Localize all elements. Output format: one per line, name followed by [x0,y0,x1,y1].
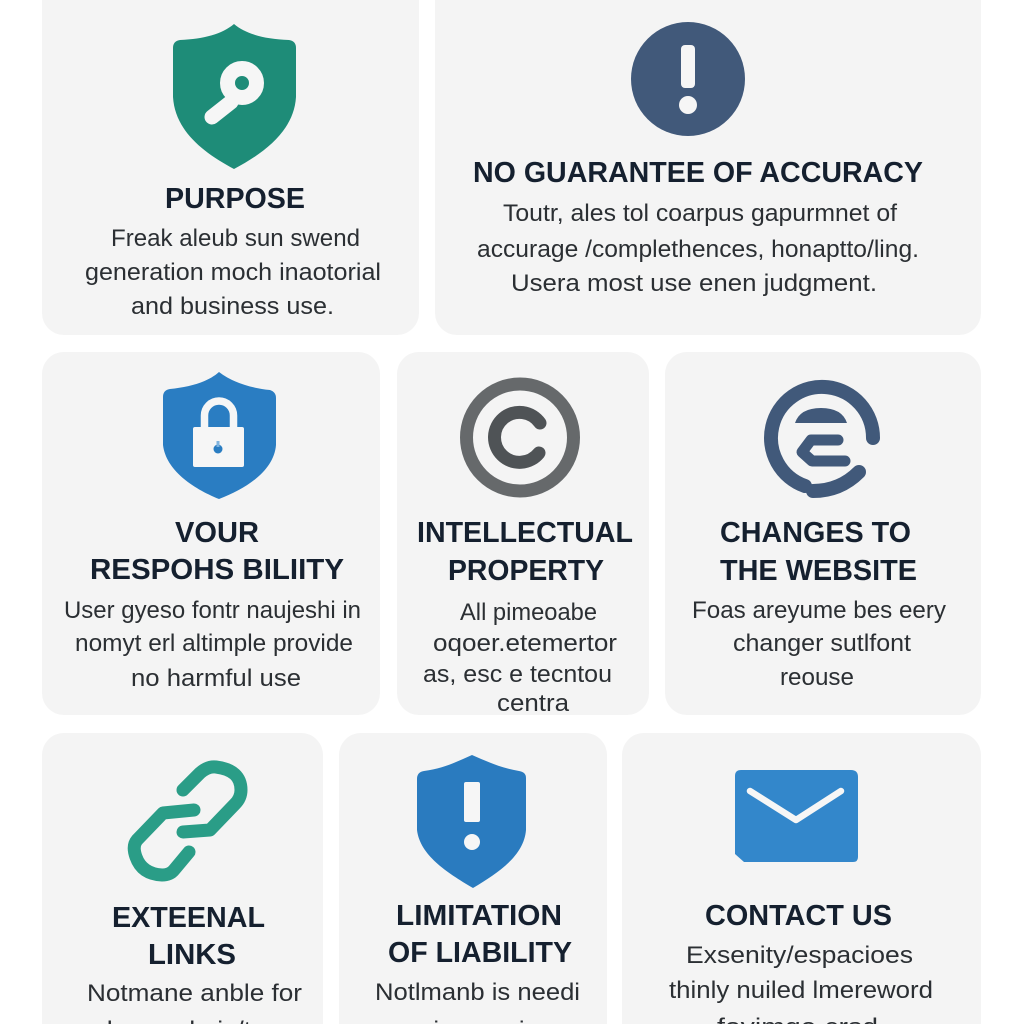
heading: external links: LINKS [148,939,236,971]
text: intellectual property body: All pimeoabe [460,599,597,626]
text: intellectual property body: oqoer.etemertor [433,630,617,657]
heading: no guarantee of accuracy: NO GUARANTEE OF ACCURACY [473,157,923,189]
heading: changes to the website [720,517,917,587]
heading: intellectual property: INTELLECTUAL [417,517,633,549]
icon: exclamation circle [631,22,745,136]
text: accuracy body [477,200,919,297]
heading: changes to the website: CHANGES TO [720,517,911,549]
text: accuracy body: Toutr, ales tol coarpus gapurmnet of [503,200,897,227]
text: changes body: Foas areyume bes eery [692,597,946,624]
text: external links body: Notmane anble for [87,980,302,1007]
panel: purpose [42,0,419,335]
icon: circular changes symbol [771,387,873,491]
text: limitation body: Notlmanb is needi [375,979,580,1006]
heading: your responsibility: RESPOHS BILIITY [90,554,344,586]
heading: intellectual property [417,517,633,587]
heading: limitation of liability: OF LIABILITY [388,937,572,969]
text: contact body: Exsenity/espacioes [686,942,913,969]
panel: changes to the website [665,352,981,715]
text: contact body [669,942,933,1024]
icon: envelope [735,770,858,862]
text: purpose body: generation moch inaotorial [85,259,381,286]
icon: green shield with key [173,24,296,169]
text: purpose body: and business use. [131,293,334,320]
text: accuracy body: accurage /complethences, honaptto/ling. [477,236,919,263]
text: intellectual property body: centra [497,690,570,717]
text: changes body: changer sutlfont [733,630,911,657]
icon: blue shield with exclamation [417,755,526,888]
text: changes body [692,597,946,691]
text: responsibility body: User gyeso fontr naujeshi in [64,597,361,624]
text: intellectual property body: as, esc e tecntou [423,661,612,688]
text: limitation body [375,979,580,1024]
text: responsibility body [64,597,361,692]
heading: changes to the website: THE WEBSITE [720,555,917,587]
text: responsibility body: no harmful use [131,665,301,692]
panel: contact us [622,733,981,1024]
text: purpose body [85,225,381,320]
heading: external links [112,902,265,971]
text: purpose body: Freak aleub sun swend [111,225,360,252]
heading: your responsibility: VOUR [175,517,259,549]
heading: purpose: PURPOSE [165,183,305,215]
icon: blue shield with padlock [163,372,276,499]
heading: intellectual property: PROPERTY [448,555,604,587]
text: responsibility body: nomyt erl altimple provide [75,630,353,657]
panel: no guarantee of accuracy [435,0,981,335]
heading: your responsibility [90,517,344,586]
text: contact body: thinly nuiled lmereword [669,977,933,1004]
heading: external links: EXTEENAL [112,902,265,934]
icon: copyright symbol [466,384,574,491]
text: accuracy body: Usera most use enen judgment. [511,270,877,297]
icon: chain link [134,767,241,875]
panel: limitation of liability [339,733,607,1024]
heading: contact us: CONTACT US [705,900,892,932]
text: changes body: reouse [780,664,854,691]
text: intellectual property body [423,599,617,717]
panel: intellectual property [397,352,649,717]
panel: external links [42,733,323,1024]
heading: limitation of liability: LIMITATION [396,900,562,932]
panel: your responsibility [42,352,380,715]
heading: limitation of liability [388,900,572,969]
text: external links body [87,980,302,1024]
